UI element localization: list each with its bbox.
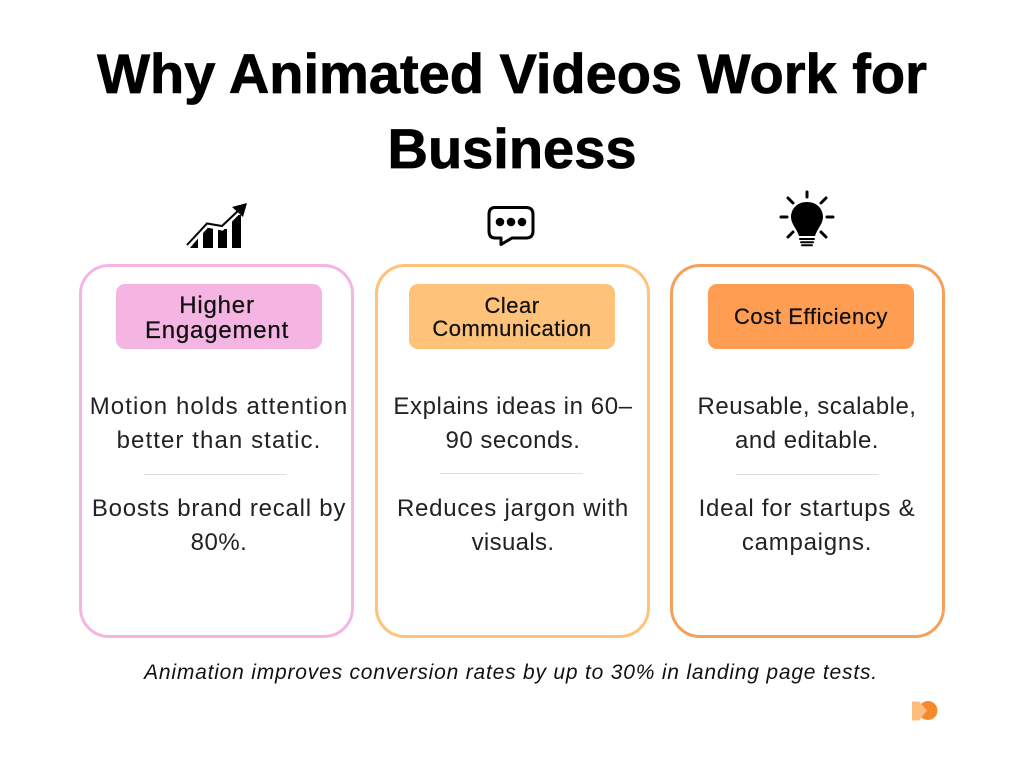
- text: motion holds attention: [90, 393, 348, 454]
- footnote: Animation improves conversion rates by up to 30% in landing page tests.: [144, 661, 878, 684]
- text: reduces jargon: [397, 495, 629, 556]
- text: boosts brand recall: 80%.: [191, 529, 247, 556]
- label: clear communication: Clear: [484, 292, 540, 318]
- text: explains ideas: [393, 393, 633, 454]
- text: reusable: and editable.: [735, 427, 879, 454]
- label: cost efficiency: Cost Efficiency: [734, 304, 888, 329]
- icon: light bulb: [780, 190, 834, 246]
- text: reduces jargon: Reduces jargon with: [397, 495, 629, 522]
- text: explains ideas: 90 seconds.: [446, 427, 580, 454]
- panel: higher engagement: [79, 264, 354, 638]
- title: Business: [388, 117, 636, 180]
- label: higher engagement: Engagement: [145, 316, 289, 344]
- icon: speech bubble: [488, 206, 534, 246]
- label: cost efficiency: [708, 284, 914, 349]
- text: reusable: [698, 393, 916, 454]
- text: reusable: Reusable, scalable,: [698, 393, 916, 420]
- icon: logo: [912, 701, 938, 720]
- text: motion holds attention: Motion holds attention: [90, 393, 348, 420]
- label: clear communication: [409, 284, 615, 349]
- text: ideal for startups: campaigns.: [742, 529, 872, 556]
- panel: clear communication: [375, 264, 650, 638]
- text: ideal for startups: Ideal for startups &: [699, 495, 915, 522]
- icon: rising bar chart: [186, 203, 247, 248]
- text: boosts brand recall: Boosts brand recall by: [92, 495, 346, 522]
- text: explains ideas: Explains ideas in 60–: [393, 393, 633, 420]
- text: motion holds attention: better than static.: [117, 427, 321, 454]
- title: Why Animated Videos Work for: [97, 42, 927, 105]
- text: boosts brand recall: [92, 495, 346, 556]
- label: higher engagement: Higher: [179, 292, 255, 318]
- text: reduces jargon: visuals.: [472, 529, 554, 556]
- label: clear communication: Communication: [432, 316, 592, 340]
- panel: cost efficiency: [670, 264, 945, 638]
- text: ideal for startups: [699, 495, 915, 556]
- title: [96, 42, 927, 180]
- label: higher engagement: [116, 284, 322, 349]
